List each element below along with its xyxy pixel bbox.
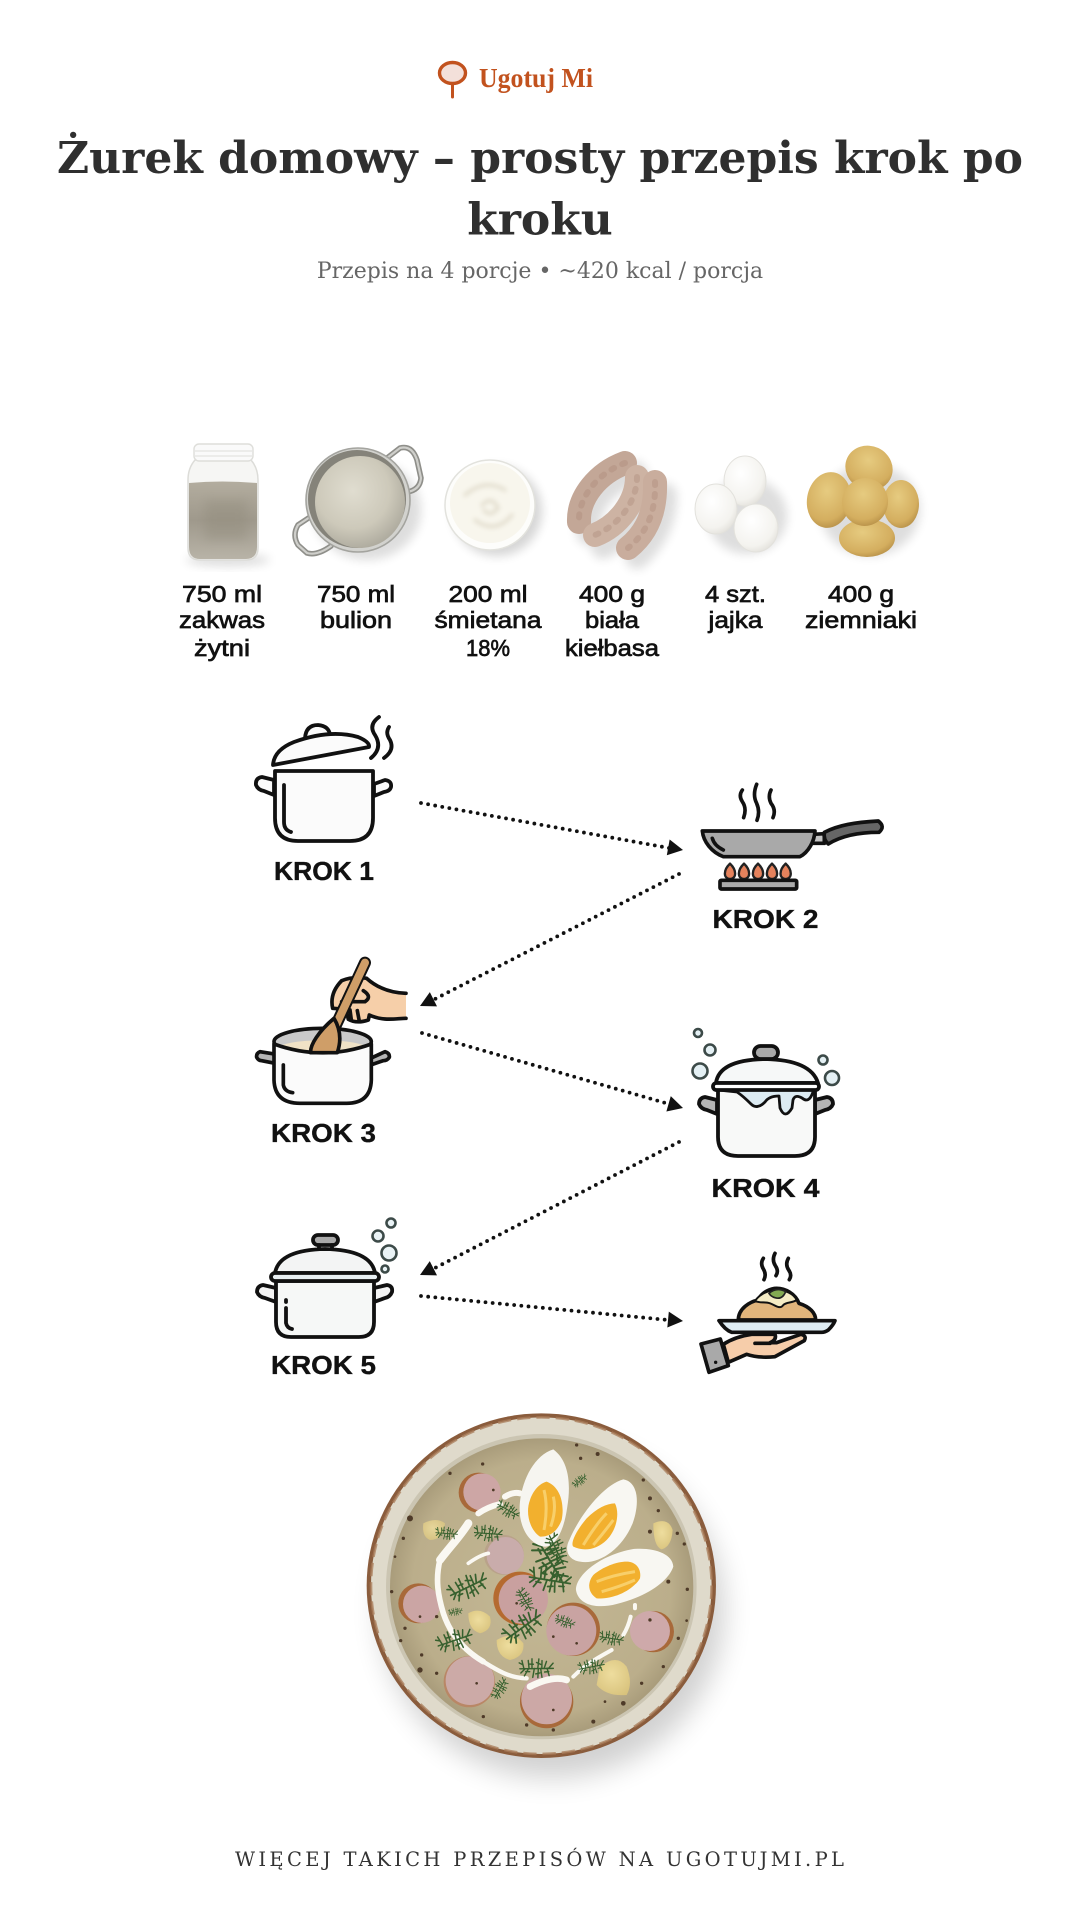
panel: ingredients <box>179 438 920 661</box>
step 2: pan on burner <box>702 784 882 934</box>
label: KROK 3: KROK 3 <box>271 1120 376 1148</box>
ingredient label: jajka: jajka <box>707 607 764 633</box>
step 3: stirring pot <box>257 963 406 1148</box>
title: Żurek domowy – prosty przepis krok po <box>57 130 1023 184</box>
ingredient label: biała kiełbasa: biała <box>585 607 640 633</box>
step 4: boiling pot <box>692 1029 839 1203</box>
ingredient label: śmietana: śmietana <box>434 607 543 633</box>
icon: pot with spoon and hand <box>257 963 406 1103</box>
dill over eggs <box>543 1531 569 1567</box>
icon: boiling-over pot <box>699 1046 833 1156</box>
icon: bubbles <box>692 1029 839 1085</box>
icon: bubbles <box>372 1218 396 1272</box>
arrow: step 4 to step 5 <box>416 1142 679 1282</box>
ingredient label: zakwas: zakwas <box>179 607 265 633</box>
final dish: bowl of żurek <box>367 1413 724 1778</box>
ingredient label: ziemniaki: 400 g <box>828 581 894 607</box>
icon: bowl of sour cream <box>445 460 542 556</box>
icon: pot <box>256 717 392 841</box>
ingredient label: śmietana: 200 ml <box>448 581 528 607</box>
subtitle: Przepis na 4 porcje • ~420 kcal / porcja <box>317 259 763 284</box>
label: KROK 4: KROK 4 <box>712 1175 820 1203</box>
ingredient label: śmietana: 18% <box>466 635 510 661</box>
icon: serving hand with plate <box>701 1253 835 1372</box>
arrow: step 2 to step 3 <box>416 874 679 1013</box>
icon: jar of rye starter <box>186 444 270 566</box>
ingredient label: bulion: 750 ml <box>317 581 395 607</box>
sausage slices <box>398 1473 674 1728</box>
ingredient label: biała kiełbasa: 400 g <box>579 581 645 607</box>
logo wordmark: Ugotuj Mi <box>479 63 593 93</box>
bowl shadow <box>380 1442 724 1778</box>
icon: potatoes <box>802 438 920 557</box>
ingredient label: biała kiełbasa: kiełbasa <box>565 635 660 661</box>
sour cream swirl <box>438 1493 635 1687</box>
icon: white sausages <box>579 463 665 557</box>
logo: Ugotuj Mi <box>440 62 593 97</box>
arrow: step 5 to serving <box>421 1296 684 1329</box>
step 1: pot with lifted lid <box>256 717 392 886</box>
label: KROK 5: KROK 5 <box>271 1352 376 1380</box>
icon: covered pot <box>257 1235 392 1337</box>
halved eggs <box>520 1449 673 1606</box>
step 5: simmering pot <box>257 1218 396 1380</box>
ingredient label: ziemniaki: ziemniaki <box>805 607 917 633</box>
title: kroku <box>467 194 613 246</box>
arrow: step 1 to step 2 <box>421 803 684 858</box>
icon: frying pan <box>702 784 882 889</box>
icon: pot of broth <box>295 448 421 560</box>
ingredient label: bulion: bulion <box>320 607 392 633</box>
pepper specks <box>390 1443 689 1732</box>
potato chunks <box>423 1520 673 1695</box>
ingredient label: jajka: 4 szt. <box>705 581 766 607</box>
arrow: step 3 to step 4 <box>422 1033 685 1116</box>
label: KROK 2: KROK 2 <box>712 906 818 934</box>
illustration: soup bowl <box>367 1413 716 1758</box>
icon: spoon logo <box>440 62 466 97</box>
ingredient label: zakwas: żytni <box>194 635 250 661</box>
icon: eggs <box>695 456 787 554</box>
ingredient label: zakwas: 750 ml <box>182 581 262 607</box>
label: KROK 1: KROK 1 <box>274 858 374 886</box>
footer call to action: WIĘCEJ TAKICH PRZEPISÓW NA UGOTUJMI.PL <box>235 1846 844 1871</box>
dill sprigs <box>434 1473 625 1701</box>
